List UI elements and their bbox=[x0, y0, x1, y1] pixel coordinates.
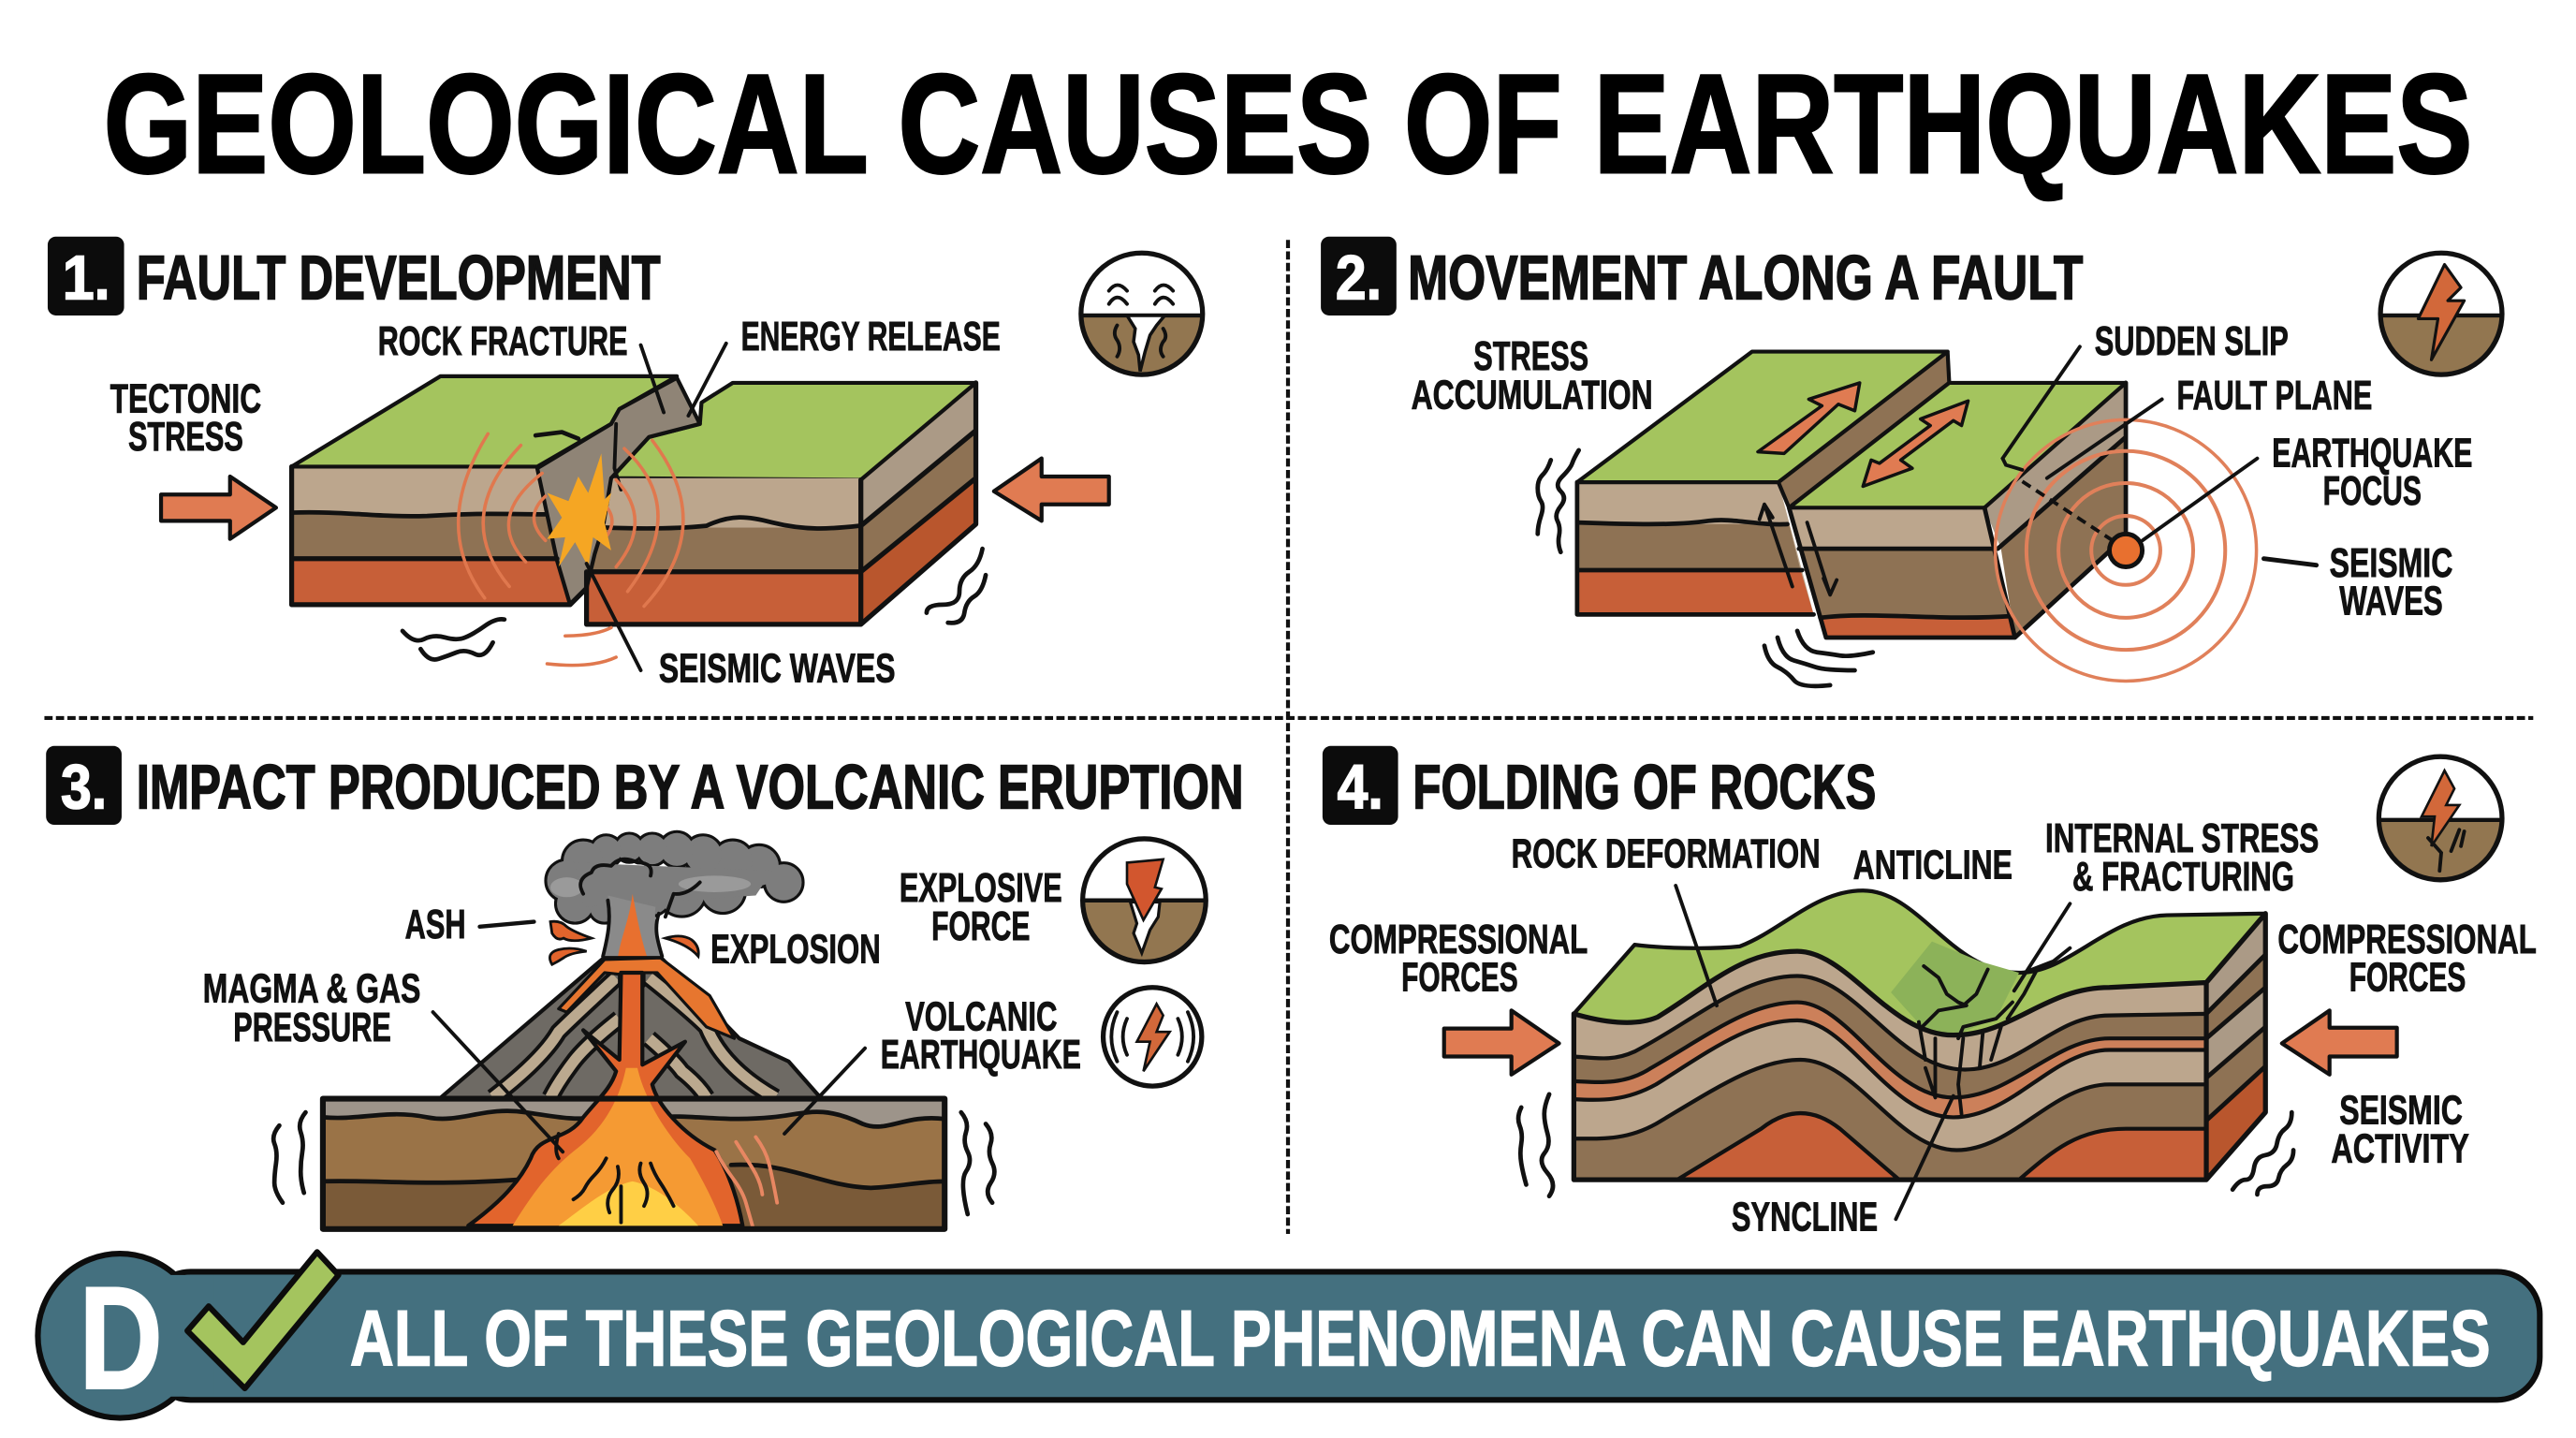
panel: movement along a fault bbox=[1321, 237, 2502, 686]
label: fault plane: FAULT PLANE bbox=[2176, 373, 2372, 418]
label: compressional forces right: FORCES bbox=[2349, 954, 2466, 1000]
label: internal stress and fracturing: INTERNAL STRESS bbox=[2045, 815, 2319, 861]
seismic wave rings and focus bbox=[1996, 419, 2257, 681]
volcano illustration bbox=[273, 833, 994, 1229]
label: energy release: ENERGY RELEASE bbox=[741, 314, 1001, 360]
label: energy release bbox=[688, 314, 1001, 416]
label: magma and gas pressure: MAGMA & GAS bbox=[203, 966, 420, 1012]
icon: explosive force bbox=[1083, 839, 1206, 963]
arrow: tectonic stress from right bbox=[994, 459, 1109, 521]
heading: folding of rocks: FOLDING OF ROCKS bbox=[1412, 753, 1876, 822]
label: earthquake focus bbox=[2143, 430, 2472, 540]
label: seismic activity bbox=[2331, 1087, 2469, 1171]
ash cloud bbox=[547, 833, 802, 922]
label: explosive force: EXPLOSIVE bbox=[900, 865, 1062, 911]
folded rock block bbox=[1518, 890, 2293, 1196]
label: volcanic earthquake: EARTHQUAKE bbox=[881, 1032, 1081, 1078]
label: earthquake focus: FOCUS bbox=[2323, 468, 2422, 514]
label: seismic activity: SEISMIC bbox=[2339, 1087, 2463, 1133]
label: syncline bbox=[1732, 1096, 1954, 1240]
arrow: tectonic stress from left bbox=[161, 477, 276, 539]
answer circle D bbox=[37, 1254, 213, 1420]
number badge 1 bbox=[48, 237, 124, 315]
label: tectonic stress: STRESS bbox=[128, 414, 243, 460]
answer banner bbox=[37, 1252, 2539, 1420]
arrow: left block motion bbox=[1758, 383, 1860, 453]
icon: volcanic earthquake bbox=[1104, 988, 1202, 1086]
number badge 4 bbox=[1323, 746, 1398, 825]
panel: fault development bbox=[48, 237, 1203, 691]
icon: lightning in ground bbox=[2380, 253, 2502, 376]
label: sudden slip bbox=[2002, 318, 2289, 470]
label: seismic activity: ACTIVITY bbox=[2331, 1125, 2469, 1171]
panel: folding of rocks bbox=[1323, 746, 2537, 1240]
label: stress accumulation: ACCUMULATION bbox=[1412, 372, 1653, 418]
icon: lightning with crack bbox=[2378, 756, 2502, 882]
label: explosive force bbox=[900, 865, 1062, 949]
label: magma and gas pressure: PRESSURE bbox=[233, 1005, 391, 1050]
label: compressional forces left bbox=[1329, 917, 1588, 1000]
icon: check mark bbox=[187, 1252, 339, 1388]
heading: impact produced by a volcanic eruption: IMPACT PRODUCED BY A VOLCANIC ERUPTION bbox=[137, 753, 1244, 822]
label: ash bbox=[405, 902, 534, 947]
label: fault plane bbox=[2047, 373, 2372, 478]
label: rock fracture: ROCK FRACTURE bbox=[378, 318, 627, 364]
label: rock deformation bbox=[1512, 831, 1821, 1005]
label: rock fracture bbox=[378, 318, 664, 413]
heading: movement along a fault: MOVEMENT ALONG A FAULT bbox=[1408, 243, 2084, 313]
label: ash: ASH bbox=[405, 902, 466, 947]
number badge 3: 3. bbox=[61, 753, 107, 822]
number badge 2 bbox=[1321, 237, 1397, 315]
label: explosive force: FORCE bbox=[931, 903, 1030, 949]
label: rock deformation: ROCK DEFORMATION bbox=[1512, 831, 1821, 877]
label: internal stress and fracturing: & FRACTURING bbox=[2072, 854, 2294, 900]
arrow: two-way slip bbox=[1863, 401, 1969, 486]
label: seismic waves: SEISMIC bbox=[2330, 540, 2452, 586]
label: seismic waves: WAVES bbox=[2339, 578, 2443, 624]
label: volcanic earthquake: VOLCANIC bbox=[905, 993, 1057, 1039]
number badge 2: 2. bbox=[1336, 243, 1382, 313]
number badge 1: 1. bbox=[63, 243, 110, 313]
number badge 4: 4. bbox=[1338, 753, 1383, 822]
arrow: compressional force from right bbox=[2282, 1010, 2397, 1075]
answer circle D: D bbox=[79, 1257, 163, 1420]
icon: cracked ground with waves bbox=[1081, 253, 1203, 376]
label: compressional forces right bbox=[2277, 917, 2537, 1000]
number badge 3 bbox=[46, 746, 122, 825]
label: seismic waves bbox=[587, 564, 896, 691]
block diagram: fault block bbox=[292, 376, 986, 666]
fracture lines bbox=[1919, 948, 2070, 1114]
label: seismic waves: SEISMIC WAVES bbox=[659, 645, 896, 691]
label: magma and gas pressure bbox=[203, 966, 563, 1152]
block diagram: strike-slip fault bbox=[1538, 352, 2126, 686]
label: compressional forces left: FORCES bbox=[1401, 954, 1518, 1000]
label: syncline: SYNCLINE bbox=[1732, 1195, 1878, 1240]
label: earthquake focus: EARTHQUAKE bbox=[2272, 430, 2472, 476]
label: stress accumulation: STRESS bbox=[1473, 333, 1588, 379]
label: sudden slip: SUDDEN SLIP bbox=[2095, 318, 2289, 364]
label: internal stress and fracturing bbox=[2014, 815, 2319, 990]
panel: volcanic eruption bbox=[46, 746, 1244, 1229]
label: stress accumulation bbox=[1412, 333, 1653, 418]
label: compressional forces left: COMPRESSIONAL bbox=[1329, 917, 1588, 962]
label: volcanic earthquake bbox=[784, 993, 1081, 1134]
arrow: compressional force from left bbox=[1444, 1010, 1559, 1075]
label: anticline: ANTICLINE bbox=[1853, 842, 2012, 888]
label: tectonic stress: TECTONIC bbox=[110, 376, 261, 422]
heading: fault development: FAULT DEVELOPMENT bbox=[137, 243, 661, 313]
label: tectonic stress bbox=[110, 376, 261, 460]
label: explosion: EXPLOSION bbox=[710, 926, 881, 972]
label: seismic waves bbox=[2263, 540, 2452, 624]
